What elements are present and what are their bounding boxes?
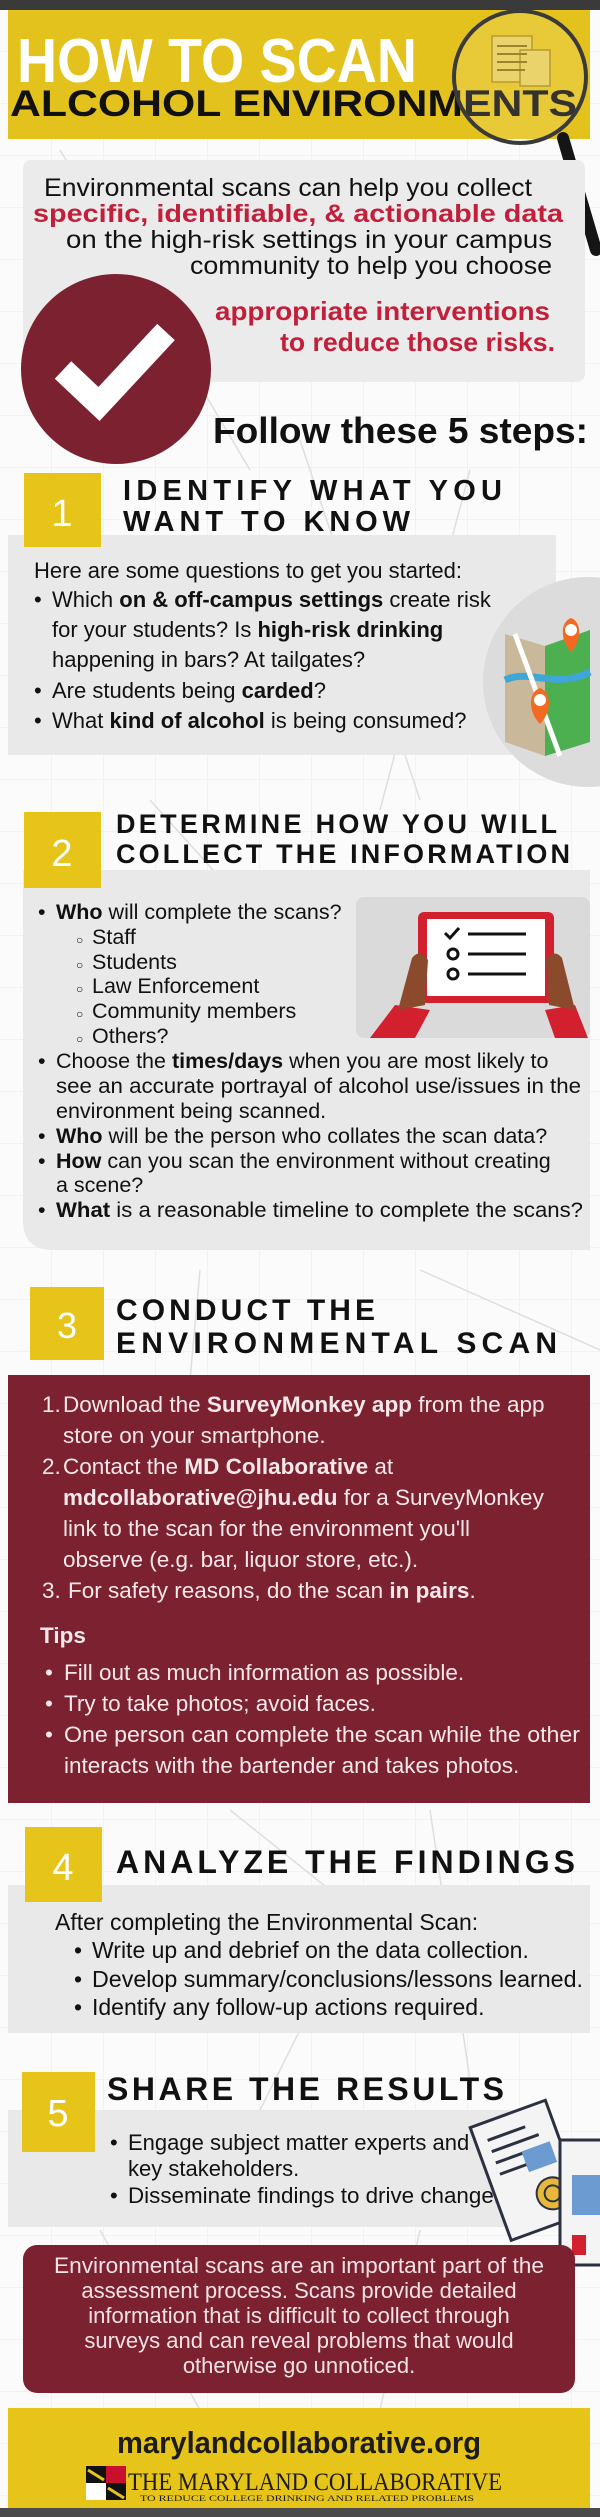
step 2 text: • — [38, 1049, 46, 1073]
intro text box: community to help you choose — [190, 252, 552, 280]
step 2 header: COLLECT THE INFORMATION — [116, 839, 570, 869]
step 5 header — [22, 2071, 504, 2152]
logo text: THE MARYLAND COLLABORATIVE — [128, 2469, 502, 2496]
callout: importance of scans: information that is difficult to collect through — [88, 2303, 510, 2328]
website url: marylandcollaborative.org — [117, 2425, 481, 2460]
callout: importance of scans: assessment process. Scans provide detailed — [81, 2278, 517, 2303]
panel: step 3 maroon: link to the scan for the environment you'll — [63, 1516, 470, 1541]
step 2 text: Choose the times/days when you are most likely to — [56, 1049, 548, 1073]
panel: step 3 maroon: Tips — [40, 1623, 86, 1648]
intro text box — [23, 160, 585, 382]
step 3 header: CONDUCT THE — [116, 1294, 375, 1327]
panel: step 3 maroon: Download the SurveyMonkey app from the app — [63, 1392, 545, 1417]
step 2 text: Staff — [92, 925, 136, 949]
panel: step 3 maroon — [8, 1375, 590, 1803]
panel: step 2 — [23, 870, 590, 1250]
panel: step 3 maroon: mdcollaborative@jhu.edu for a SurveyMonkey — [63, 1485, 545, 1510]
step 1 header: IDENTIFY WHAT YOU — [123, 475, 502, 507]
panel: step 3 maroon: Try to take photos; avoid faces. — [64, 1691, 376, 1716]
step 1 text: What kind of alcohol is being consumed? — [52, 708, 466, 733]
step 1 text: • — [34, 587, 42, 612]
step 2 text: ○ — [76, 1007, 83, 1021]
step 1 header: WANT TO KNOW — [123, 506, 411, 538]
step 2 text: see an accurate portrayal of alcohol use/issues in the — [56, 1074, 581, 1098]
step 2 text: Who will be the person who collates the scan data? — [56, 1124, 547, 1148]
intro text box: appropriate interventions — [215, 296, 550, 326]
step 1 text: Which on & off-campus settings create risk — [52, 587, 492, 612]
panel: step 4: Identify any follow-up actions required. — [92, 1994, 484, 2020]
step 3 header — [30, 1287, 557, 1360]
title banner — [8, 10, 590, 139]
callout: importance of scans: Environmental scans are an important part of the — [54, 2253, 544, 2278]
step 2 text: • — [38, 900, 46, 924]
panel: step 3 maroon: • — [45, 1660, 53, 1685]
icon: maryland flag logo — [86, 2466, 126, 2500]
step 2 text: Community members — [92, 999, 296, 1023]
callout: importance of scans — [23, 2245, 575, 2393]
panel: step 3 maroon: 1. — [42, 1392, 61, 1417]
step 1 text: Here are some questions to get you started: — [34, 558, 462, 583]
footer: TO REDUCE COLLEGE DRINKING AND RELATED PROBLEMS — [140, 2494, 474, 2503]
step 2 text: • — [38, 1124, 46, 1148]
step 2 text: Who will complete the scans? — [56, 900, 342, 924]
panel: step 3 maroon: store on your smartphone. — [63, 1423, 326, 1448]
panel: step 5: Engage subject matter experts and — [128, 2130, 469, 2155]
title line 2: ALCOHOL ENVIRONMENTS — [10, 83, 577, 124]
step 2 text: Law Enforcement — [92, 974, 259, 998]
step 2 text: • — [38, 1198, 46, 1222]
panel: step 3 maroon: observe (e.g. bar, liquor store, etc.). — [63, 1547, 418, 1572]
panel: step 3 maroon: 2. — [42, 1454, 61, 1479]
panel: step 5: • — [110, 2130, 118, 2155]
intro text box: specific, identifiable, & actionable data — [33, 200, 564, 228]
step 2 text: How can you scan the environment without creating — [56, 1149, 551, 1173]
step 2 text: environment being scanned. — [56, 1099, 326, 1123]
step 2 header: DETERMINE HOW YOU WILL — [116, 809, 557, 839]
step 1 text: for your students? Is high-risk drinking — [52, 617, 443, 642]
panel: step 4: Write up and debrief on the data collection. — [92, 1937, 529, 1963]
step 2 text: ○ — [76, 958, 83, 972]
step 5 header: 5 — [47, 2093, 69, 2135]
icon: tablet checklist — [356, 897, 590, 1038]
panel: step 5 — [8, 2110, 538, 2227]
footer — [8, 2408, 590, 2508]
step 1 text: • — [34, 678, 42, 703]
step 2 text: ○ — [76, 1032, 83, 1046]
step 2 text: • — [38, 1149, 46, 1173]
panel: step 4: • — [74, 1966, 82, 1992]
step 4 header: ANALYZE THE FINDINGS — [116, 1844, 575, 1880]
step 1 text: Are students being carded? — [52, 678, 326, 703]
step 1 text: happening in bars? At tailgates? — [52, 647, 365, 672]
panel: step 3 maroon: • — [45, 1691, 53, 1716]
icon: map circle — [483, 577, 600, 787]
step 2 text — [38, 900, 583, 1222]
panel: step 1 — [8, 535, 600, 787]
step 2 text: Students — [92, 950, 177, 974]
intro text box: to reduce those risks. — [280, 327, 555, 357]
panel: step 5: key stakeholders. — [128, 2156, 299, 2181]
icon: report documents — [470, 2100, 600, 2265]
step 1 header: 1 — [51, 493, 73, 535]
panel: step 4: After completing the Environmental Scan: — [55, 1909, 478, 1935]
step 2 text: ○ — [76, 933, 83, 947]
panel: step 5: Disseminate findings to drive change. — [128, 2183, 500, 2208]
panel: step 4: Develop summary/conclusions/lessons learned. — [92, 1966, 583, 1992]
intro text box: on the high-risk settings in your campus — [66, 226, 552, 254]
step 2 text: a scene? — [56, 1173, 143, 1197]
step 4 header — [25, 1827, 575, 1902]
step 1 text — [34, 558, 492, 733]
panel: step 3 maroon: Contact the MD Collaborative at — [63, 1454, 394, 1479]
panel: step 3 maroon: 3. — [42, 1578, 61, 1603]
step 3 header: ENVIRONMENTAL SCAN — [116, 1327, 557, 1360]
panel: step 4: • — [74, 1937, 82, 1963]
step 2 header: 2 — [51, 833, 73, 875]
callout: importance of scans: otherwise go unnoticed. — [183, 2353, 415, 2378]
panel: step 5: • — [110, 2183, 118, 2208]
step 2 text: What is a reasonable timeline to complete the scans? — [56, 1198, 583, 1222]
title line 1: HOW TO SCAN — [17, 27, 417, 96]
panel: step 4 — [8, 1885, 590, 2033]
step 1 text: • — [34, 708, 42, 733]
step 3 header: 3 — [57, 1305, 77, 1346]
panel: step 4: • — [74, 1994, 82, 2020]
step 1 header — [24, 473, 502, 547]
panel: step 3 maroon: Fill out as much information as possible. — [64, 1660, 464, 1685]
step 4 header: 4 — [52, 1847, 74, 1889]
step 2 text: Others? — [92, 1024, 169, 1048]
step 5 header: SHARE THE RESULTS — [107, 2071, 504, 2107]
icon: check circle — [21, 274, 211, 464]
panel: step 3 maroon: For safety reasons, do the scan in pairs. — [68, 1578, 476, 1603]
callout: importance of scans: surveys and can reveal problems that would — [84, 2328, 514, 2353]
panel: step 3 maroon: interacts with the bartender and takes photos. — [64, 1753, 519, 1778]
heading: follow these 5 steps: Follow these 5 steps: — [213, 410, 588, 451]
step 2 header — [24, 809, 570, 888]
icon: magnifying glass — [454, 11, 596, 250]
step 2 text: ○ — [76, 982, 83, 996]
panel: step 3 maroon: • — [45, 1722, 53, 1747]
panel: step 3 maroon: One person can complete the scan while the other — [64, 1722, 581, 1747]
intro text box: Environmental scans can help you collect — [44, 174, 532, 202]
